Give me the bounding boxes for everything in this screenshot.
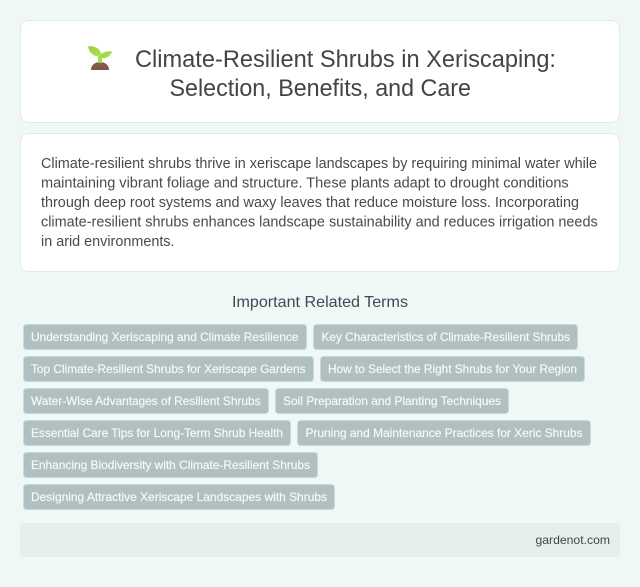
description text: Climate-resilient shrubs thrive in xeriscape landscapes by requiring minimal water while <box>41 156 597 172</box>
tag: how to select: How to Select the Right Shrubs for Your Region <box>328 362 577 376</box>
tag: understanding xeriscaping <box>24 324 306 350</box>
tag: soil preparation <box>276 388 508 414</box>
tag: pruning <box>298 420 590 446</box>
tag: key characteristics <box>314 324 578 350</box>
tag: biodiversity <box>24 452 318 478</box>
title: Selection, Benefits, and Care <box>170 75 471 102</box>
tag: key characteristics: Key Characteristics of Climate-Resilient Shrubs <box>322 330 570 344</box>
tag: understanding xeriscaping: Understanding Xeriscaping and Climate Resilience <box>31 330 299 344</box>
footer text: gardenot.com <box>536 533 610 547</box>
tag: essential care <box>24 420 290 446</box>
description text: maintaining vibrant foliage and structure. These plants adapt to drought conditions <box>41 176 569 192</box>
tag: water-wise: Water-Wise Advantages of Resilient Shrubs <box>31 394 260 408</box>
description text: climate-resilient shrubs enhances landscape sustainability and reduces irrigation needs <box>41 214 598 230</box>
tag: top shrubs: Top Climate-Resilient Shrubs for Xeriscape Gardens <box>31 362 306 376</box>
tag list <box>24 324 590 510</box>
panel: description <box>20 134 620 272</box>
tag: water-wise <box>24 388 268 414</box>
tag: biodiversity: Enhancing Biodiversity with Climate-Resilient Shrubs <box>31 458 310 472</box>
header panel <box>20 20 620 122</box>
tag: soil preparation: Soil Preparation and Planting Techniques <box>283 394 501 408</box>
tag: designing <box>24 484 334 510</box>
tag: essential care: Essential Care Tips for Long-Term Shrub Health <box>31 426 283 440</box>
tag: designing: Designing Attractive Xeriscape Landscapes with Shrubs <box>31 490 327 504</box>
description text: in arid environments. <box>41 234 174 250</box>
tag: top shrubs <box>24 356 314 382</box>
tag: pruning: Pruning and Maintenance Practices for Xeric Shrubs <box>306 426 582 440</box>
footer <box>20 523 620 557</box>
title: Climate-Resilient Shrubs in Xeriscaping: <box>135 46 556 73</box>
heading: important related terms: Important Related Terms <box>232 294 408 311</box>
tag: how to select <box>320 356 584 382</box>
icon: seedling <box>88 46 112 70</box>
description text: through deep root systems and waxy leaves that reduce moisture loss. Incorporating <box>41 195 579 211</box>
